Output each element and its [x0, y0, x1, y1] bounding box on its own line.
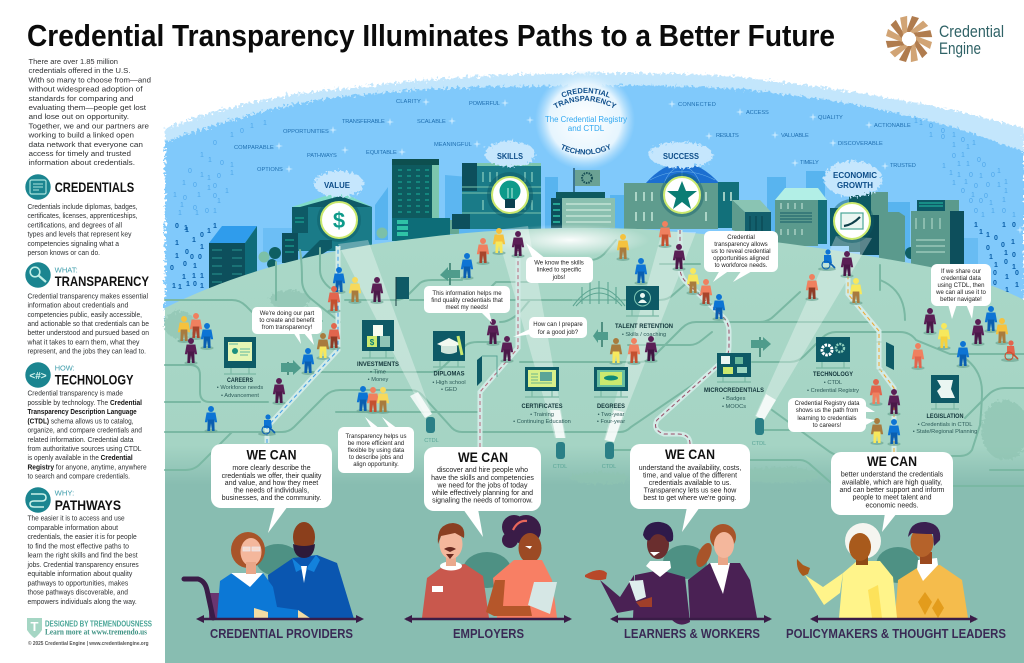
building: right office — [911, 200, 964, 273]
speech bubble: registry: to careers! — [813, 423, 842, 429]
audience label: POLICYMAKERS & THOUGHT LEADERS — [786, 627, 1006, 641]
logo: Credential Engine — [884, 14, 1004, 64]
callout: we can, policymakers — [831, 452, 953, 532]
path: economic growth route — [848, 262, 894, 452]
panel: transparency: better understood and pursued based on — [28, 328, 149, 337]
billboard: microcredentials: • Badges — [723, 396, 746, 402]
panel: transparency: WHAT: — [55, 266, 78, 275]
panel: technology: is openly available in the Credential — [28, 453, 133, 462]
callout: we can, credential providers: WE CAN — [246, 446, 296, 462]
icon: winding path — [25, 487, 51, 513]
intro text block: working to build a linked open — [27, 131, 134, 140]
center badge: credential transparency technology — [536, 72, 634, 168]
billboard: investments — [357, 320, 400, 383]
speech bubble: reveal opportunities — [704, 231, 778, 282]
billboard: diplomas — [432, 331, 466, 393]
spotlight 2 — [553, 442, 567, 470]
audience: learners and workers — [585, 522, 772, 641]
speech bubble: skills quote: jobs! — [552, 275, 566, 281]
arrow divider — [810, 615, 978, 623]
speech bubble: reveal opportunities: opportunities aligned — [713, 256, 769, 262]
callout: we can, employers — [424, 447, 541, 537]
intro text block: standards for comparing and — [28, 94, 134, 103]
billboard: technology — [807, 337, 859, 394]
panel: pathways: PATHWAYS — [55, 497, 121, 513]
billboard: diplomas: • GED — [441, 387, 457, 393]
panel: technology: Registry for anyone, anytime, anywhere — [28, 462, 147, 471]
beam: economic growth spotlight — [755, 236, 872, 420]
intro text block: without widespread adoption of — [27, 85, 143, 94]
sky keywords: ACCESS — [746, 110, 769, 116]
speech bubble: information quote: meet my needs! — [445, 305, 489, 311]
logo: Credential Engine: Engine — [939, 39, 981, 58]
speech bubble: efficiency: to describe jobs and — [349, 455, 403, 461]
speech bubble: registry: learning to credentials — [797, 416, 857, 422]
label: success: SUCCESS — [663, 152, 700, 161]
panel: technology: HOW: — [55, 364, 75, 373]
intro text block: information about credentials. — [28, 158, 135, 167]
billboard: certificates: • Continuing Education — [513, 419, 571, 425]
speech bubble: provider quote — [252, 307, 322, 345]
door 2 — [477, 356, 497, 386]
wheelchair — [184, 579, 220, 618]
sky keywords: RESULTS — [716, 133, 739, 139]
billboard: degrees: DEGREES — [597, 403, 626, 410]
path: skills route — [480, 250, 518, 447]
arrow sign: right 1 — [281, 360, 301, 375]
billboard: talent retention — [615, 286, 673, 338]
CTDL spotlights — [424, 417, 766, 470]
speech bubble: share data: we can all use it to — [935, 290, 987, 296]
icon: magnifying glass — [25, 262, 51, 288]
billboard: investments: • Time — [370, 370, 386, 376]
arrow divider — [196, 615, 364, 623]
man figure — [895, 522, 968, 618]
speech bubble: provider quote: to create and benefit — [259, 318, 315, 324]
panel: technology: possible by technology. The Credential — [28, 398, 142, 407]
audience label: LEARNERS & WORKERS — [624, 627, 760, 641]
speech bubble: prepare quote: How can I prepare — [533, 322, 583, 328]
intro text block: evaluating them—people get lost — [28, 103, 147, 112]
spotlight 4 — [752, 418, 766, 447]
speech bubble: efficiency: be more efficient and — [348, 441, 404, 447]
speech bubble: efficiency: align opportunity. — [353, 462, 399, 468]
arrow divider — [404, 615, 572, 623]
speech bubble: information quote — [424, 286, 510, 323]
footer credits: DESIGNED BY TREMENDOUSNESS — [45, 618, 152, 628]
center badge: credential transparency technology: TECHNOLOGY — [562, 144, 610, 154]
medallion: success star — [660, 173, 704, 217]
panel: pathways: those pathways discoverable, and — [28, 588, 128, 597]
billboard: degrees: • Four-year — [597, 419, 625, 425]
panel: pathways — [25, 487, 139, 606]
logo icon: swirl — [884, 14, 934, 64]
speech bubble: skills quote: linked to specific — [537, 268, 581, 274]
building: value bank — [282, 191, 372, 263]
woman figure — [688, 524, 757, 618]
callout: we can, credential providers — [211, 444, 332, 533]
billboard: legislation: LEGISLATION — [926, 413, 964, 420]
panel: technology: Transparency Description Language — [28, 407, 137, 416]
speech bubble: registry: shows us the path from — [796, 408, 858, 414]
clouds behind labels — [314, 141, 882, 197]
speech bubble: provider quote: from transparency! — [262, 325, 313, 331]
panel: technology — [25, 362, 147, 481]
bush — [876, 547, 920, 583]
sky keywords: OPTIONS — [257, 167, 283, 173]
panel: credentials: CREDENTIALS — [55, 179, 134, 195]
panel: pathways: WHY: — [55, 489, 74, 498]
panel: credentials: competencies signaling what a — [28, 239, 120, 248]
panel: pathways: jobs. Credential transparency ensures — [27, 560, 139, 569]
man figure — [422, 523, 489, 618]
speech bubble: efficiency: flexible by using data — [348, 448, 405, 454]
arrow sign: left 1 — [440, 263, 460, 285]
woman figure — [486, 515, 557, 618]
path: success route — [656, 230, 729, 444]
icon: credential certificate — [25, 174, 51, 200]
billboard: careers: • Workforce needs — [217, 385, 263, 391]
panel: credentials: types and levels that represent key — [28, 230, 132, 239]
label: economic growth: GROWTH — [837, 181, 873, 190]
billboard: investments: INVESTMENTS — [357, 361, 400, 368]
panel: transparency: TRANSPARENCY — [55, 273, 150, 289]
hillside ground — [165, 228, 1024, 663]
billboard: microcredentials — [704, 353, 765, 410]
spotlight 3 — [602, 442, 616, 470]
woman figure — [797, 523, 897, 618]
callout: we can, policymakers: available, which are high quality, — [842, 480, 942, 486]
billboard: investments: • Money — [368, 377, 388, 383]
sky keywords: ACTIONABLE — [874, 123, 911, 129]
audience: policymakers and thought leaders — [786, 522, 1006, 641]
panel: pathways: The easier it is to access and use — [28, 514, 125, 523]
small figures on the hill — [177, 221, 1019, 446]
arrow divider — [610, 615, 772, 623]
bush — [663, 545, 707, 579]
billboard: technology: • Credential Registry — [807, 388, 859, 394]
binary stream right: 1100101101101011101101011100110101001101011 — [914, 118, 1016, 219]
medallion: skills light bulb — [487, 172, 533, 218]
binary stream right: 111100100110101010011 — [974, 222, 1019, 294]
speech bubble: reveal opportunities: transparency allows — [714, 242, 768, 248]
speech bubble: skills quote: We know the skills — [534, 260, 584, 266]
intro text block: data network that everyone can — [28, 140, 143, 149]
spotlight 1 — [424, 417, 439, 444]
billboard: legislation: • State/Regional Planning — [913, 429, 977, 435]
sky keywords: TIMELY — [800, 160, 819, 166]
label: value: VALUE — [324, 181, 351, 190]
label: economic growth — [833, 171, 877, 190]
beam: success spotlight — [604, 232, 696, 442]
callout: we can, learners and workers: best to get where we're going. — [643, 495, 737, 502]
intro text block: There are over 1.85 million — [28, 57, 118, 66]
billboard: investments: $ — [370, 338, 375, 347]
building: left tower — [209, 226, 257, 300]
panel: credentials — [25, 174, 137, 257]
label: economic growth: ECONOMIC — [833, 171, 877, 180]
billboard: diplomas: DIPLOMAS — [434, 371, 465, 378]
billboard: microcredentials: MICROCREDENTIALS — [704, 387, 765, 394]
callout: we can, learners and workers: understand the availability, costs, — [639, 465, 741, 472]
panel: transparency: competencies public, easily accessible, — [28, 310, 142, 319]
spotlight 4: CTDL — [752, 441, 766, 447]
billboard: microcredentials: • MOOCs — [722, 404, 746, 410]
footer credits — [27, 618, 152, 647]
sky keywords: QUALITY — [818, 115, 843, 121]
billboard: legislation — [913, 375, 977, 435]
speech bubble: reveal opportunities: us to reveal credential — [711, 249, 771, 255]
sky keywords: TRUSTED — [890, 163, 916, 169]
circuit pathways — [165, 240, 1024, 486]
callout: we can, learners and workers: credentials available to us. — [649, 480, 731, 487]
speech bubble: prepare quote: for a good job? — [538, 330, 579, 336]
bush — [463, 552, 511, 588]
intro text block: credentials offered in the U.S. — [28, 66, 130, 75]
billboard: talent retention: TALENT RETENTION — [615, 323, 673, 330]
medallion: economic growth chart — [830, 199, 874, 243]
signs, bridge and doors — [281, 263, 894, 386]
billboard: technology: • CTDL — [824, 380, 842, 386]
far skyline — [263, 171, 978, 278]
panel: technology: TECHNOLOGY — [55, 371, 134, 387]
center badge: credential transparency technology: and CTDL — [568, 124, 605, 133]
billboard: certificates — [513, 367, 571, 425]
callout: we can, credential providers: more clearly describe the — [232, 465, 311, 472]
speech bubble: information quote: This information helps me — [432, 291, 502, 297]
illustration: sky — [165, 73, 1024, 330]
speech bubble: efficiency: Transparency helps us — [346, 434, 406, 440]
speech bubble: reveal opportunities: to workforce needs. — [715, 263, 768, 269]
building: economic growth cluster — [830, 192, 905, 262]
speech bubble: share data — [931, 264, 991, 319]
medallion: value dollar — [317, 198, 361, 242]
center badge: credential transparency technology: TRANSPARENCY — [553, 96, 617, 108]
panel: pathways: learn the right skills and find the best — [28, 551, 138, 560]
billboard: certificates: CERTIFICATES — [522, 403, 563, 410]
panel: pathways: empowers individuals along the way. — [28, 597, 137, 606]
panel: credentials: Credentials include diplomas, badges, — [28, 202, 138, 211]
medallion beams highlights — [410, 392, 776, 442]
intro text block: access for timely and trusted — [28, 149, 131, 158]
sky keywords: EQUITABLE — [366, 150, 397, 156]
building: tall office tower — [392, 159, 459, 241]
sky keywords: CONNECTED — [678, 102, 716, 108]
sky keywords: PATHWAYS — [307, 153, 337, 159]
sky keywords: CLARITY — [396, 99, 421, 105]
panel: technology: from authoritative sources using CTDL — [28, 444, 142, 453]
panel: technology: organize, and compare credentials and — [28, 426, 142, 435]
door 3 — [873, 342, 894, 370]
building: mid office — [775, 188, 827, 246]
speech bubble: registry: Credential Registry data — [795, 401, 860, 407]
spotlight 1: CTDL — [424, 438, 439, 444]
billboard: diplomas: • High school — [432, 380, 466, 386]
building: success dome — [624, 163, 771, 236]
panel: pathways: comparable information about — [28, 523, 119, 532]
callout: we can, learners and workers: time, and value of the different — [643, 472, 737, 480]
building: flag headquarters — [551, 168, 615, 228]
speech bubble: registry — [788, 398, 875, 432]
audience label: EMPLOYERS — [453, 627, 524, 641]
panel: credentials: person knows or can do. — [28, 248, 100, 257]
panel: transparency — [25, 262, 150, 356]
center badge: credential transparency technology: The Credential Registry — [545, 115, 627, 124]
binary stream left: 011101110110001011111011 — [170, 223, 217, 291]
intro text block — [27, 57, 151, 167]
logo: Credential Engine: Credential — [939, 22, 1004, 41]
spotlight 2: CTDL — [553, 464, 567, 470]
panel: transparency: Credential transparency makes essential — [28, 291, 148, 300]
title: Credential Transparency Illuminates Paths to a Better Future — [27, 18, 835, 53]
panel: transparency: information about credentials and — [28, 300, 128, 310]
sky keywords: TRANSFERABLE — [342, 119, 385, 125]
callout: we can, credential providers: and value, and how they meet — [225, 480, 318, 487]
sky keywords: SCALABLE — [417, 119, 446, 125]
spotlight 3: CTDL — [602, 464, 616, 470]
panel: technology: Credential transparency is made — [28, 389, 123, 398]
billboard: talent retention: • Skills / coaching — [622, 332, 666, 338]
callout: we can, employers: signaling the needs of tomorrow. — [432, 498, 533, 504]
medallion: value dollar: $ — [333, 208, 345, 233]
panel: credentials: certifications, and degrees of all — [28, 220, 122, 230]
callout: we can, credential providers: the needs of individuals, — [234, 488, 309, 494]
billboard: careers — [217, 337, 263, 399]
panel: pathways: pathways to opportunities, makes — [28, 578, 128, 587]
panel: transparency: what it takes to earn them, what they — [27, 337, 140, 346]
callout: we can, learners and workers: Transparency lets us see how — [644, 488, 737, 494]
binary stream left — [170, 120, 267, 291]
icon: code tag: <#> — [29, 371, 47, 382]
panel: technology: (CTDL) schema allows us to catalog, — [28, 416, 134, 425]
callout: we can, policymakers: and can better support and inform — [839, 487, 945, 494]
binary stream right — [914, 118, 1019, 294]
panel: transparency: represent, and the jobs they can lead to. — [28, 347, 146, 356]
panel: technology: to search and compare credentials. — [28, 472, 130, 481]
man figure — [268, 522, 354, 619]
icon: Tremendousness shield: T — [31, 619, 39, 634]
sky keywords — [234, 98, 1024, 234]
footer credits: © 2025 Credential Engine | www.credentialengine.org — [28, 640, 148, 647]
sky keywords: MEANINGFUL — [434, 142, 472, 148]
callout: we can, policymakers: people to meet talent and — [852, 494, 932, 502]
white glow on the crest — [490, 224, 650, 256]
sky keywords: POWERFUL — [469, 101, 500, 107]
sky keywords: DISCOVERABLE — [838, 141, 883, 147]
speech bubble: efficiency — [338, 417, 414, 473]
callout: we can, learners and workers: WE CAN — [665, 446, 715, 462]
billboard: legislation: • Credentials in CTDL — [918, 422, 972, 428]
callout: we can, employers: have the skills and competencies — [431, 475, 534, 482]
arrow sign: right 2 — [751, 337, 771, 357]
intro text block: Together, we and our partners are — [28, 121, 149, 130]
audience label: CREDENTIAL PROVIDERS — [210, 627, 353, 641]
arrow sign: left 2 — [593, 322, 608, 347]
intro text block: With so many to choose from—and — [28, 75, 151, 84]
callout: we can, policymakers: economic needs. — [866, 502, 919, 510]
billboard: certificates: • Training — [530, 412, 554, 418]
speech bubble: prepare quote — [513, 317, 587, 338]
sky keywords: COMPARABLE — [234, 145, 274, 151]
sky keywords: OPPORTUNITIES — [283, 129, 329, 135]
door 1 — [396, 277, 409, 306]
audience: employers — [404, 515, 572, 641]
center badge: credential transparency technology: CREDENTIAL — [562, 88, 610, 98]
callout: we can, policymakers: better understand the credentials — [841, 472, 944, 478]
beam: value spotlight — [338, 240, 432, 417]
callout: we can, credential providers: credentials we offer, their quality — [222, 473, 322, 480]
label: skills: SKILLS — [497, 152, 524, 161]
callout: we can, credential providers: businesses, and the community. — [222, 495, 321, 502]
woman figure — [217, 532, 310, 618]
panel: credentials: certificates, licenses, apprenticeships, — [28, 211, 138, 220]
speech bubble: share data: using CTDL, then — [937, 283, 985, 289]
audience: credential providers — [184, 522, 364, 641]
building: skills — [452, 163, 541, 229]
trees — [258, 228, 917, 269]
billboard: careers: CAREERS — [227, 377, 253, 384]
callout: we can, employers: we need for the jobs of today — [437, 482, 528, 490]
footer credits: Learn more at www.tremendo.us — [45, 628, 147, 636]
bridge — [573, 281, 625, 306]
panel: technology: related information. Credential data — [28, 435, 134, 444]
billboard: careers: • Advancement — [221, 393, 259, 399]
panel: pathways: credentials, the easier it is for people — [28, 532, 137, 541]
man figure — [585, 522, 690, 625]
intro text block: and lose out on opportunity. — [28, 112, 129, 121]
darker speckled hill patches — [164, 290, 1024, 484]
beam: skills spotlight — [496, 226, 566, 438]
panel: pathways: equitable information about quality — [28, 569, 132, 578]
speech bubble: share data: better navigate! — [940, 297, 982, 303]
speech bubble: share data: credential data — [941, 276, 981, 282]
speech bubble: share data: If we share our — [941, 269, 981, 275]
path: value route — [267, 246, 338, 443]
callout: we can, employers: discover and hire people who — [437, 467, 528, 474]
callout: we can, employers: while effectively planning for and — [431, 490, 533, 497]
billboard: technology: TECHNOLOGY — [813, 371, 854, 378]
speech bubble: provider quote: We're doing our part — [260, 311, 315, 317]
speech bubble: information quote: find quality credentials that — [431, 298, 503, 304]
panel: pathways: to find the most effective paths to — [28, 541, 129, 550]
billboard: degrees: • Two-year — [598, 412, 625, 418]
callout: we can, policymakers: WE CAN — [867, 453, 917, 469]
bush — [256, 544, 300, 576]
callout: we can, employers: WE CAN — [458, 449, 508, 465]
speech bubble: reveal opportunities: Credential — [727, 235, 755, 241]
sky keywords: VALUABLE — [781, 133, 809, 139]
billboard: degrees — [594, 367, 628, 425]
binary stream left: 110101101011011010110101011101 — [173, 120, 267, 217]
speech bubble: skills quote — [526, 243, 593, 283]
callout: we can, learners and workers — [630, 444, 750, 532]
panel: transparency: and actionable so that credentials can be — [28, 319, 149, 328]
